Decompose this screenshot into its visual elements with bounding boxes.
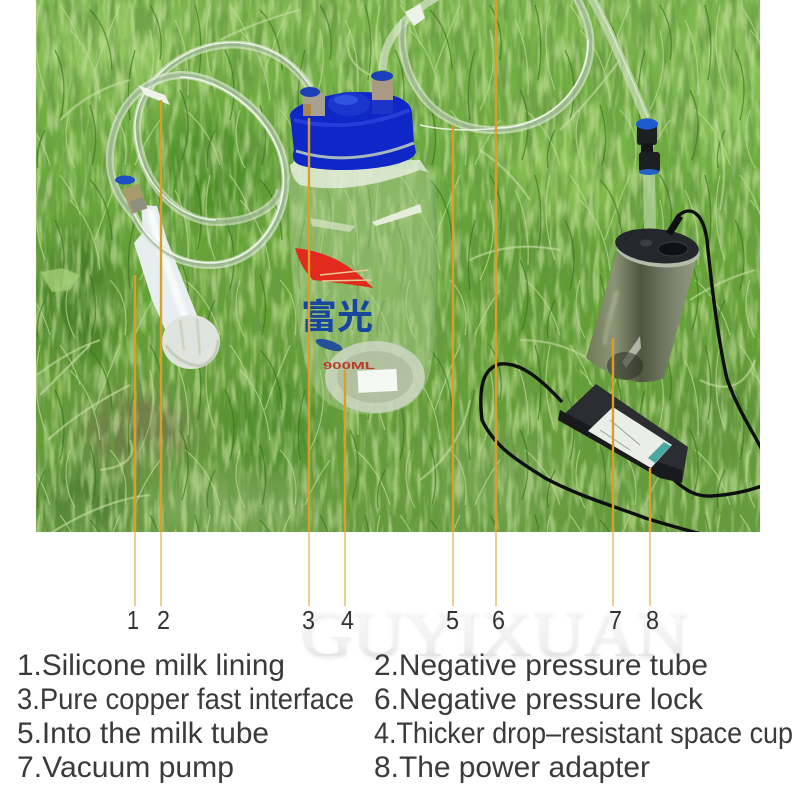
jar small red text: 900ML — [323, 361, 375, 372]
clear tube: lining to jar — [135, 43, 310, 222]
photo: milking kit on grass — [30, 0, 765, 540]
clear tube: to vacuum pump — [590, 0, 650, 232]
jar bottom disc — [325, 341, 425, 413]
jar blue oval — [316, 338, 342, 352]
legend text: 3.Pure copper fast interface — [17, 683, 354, 716]
legend text: 5.Into the milk tube — [17, 717, 269, 750]
pump power cord — [669, 211, 762, 450]
number labels — [127, 605, 659, 635]
watermark GUYIXUAN: GUYIXUAN — [300, 598, 688, 671]
number labels: 7 — [609, 605, 622, 635]
negative pressure lock — [636, 118, 660, 175]
blue jar lid — [290, 92, 416, 170]
number labels: 1 — [127, 605, 139, 635]
leader lines below photo — [135, 532, 650, 606]
silicone milk lining — [134, 205, 220, 369]
legend text: 7.Vacuum pump — [17, 751, 234, 784]
vacuum pump — [586, 225, 702, 382]
clear tube: large loop — [110, 75, 286, 265]
number labels: 2 — [157, 605, 170, 635]
jar body — [289, 165, 436, 414]
legend text: 2.Negative pressure tube — [374, 649, 708, 682]
tube clip — [138, 85, 170, 105]
jar white label — [357, 369, 397, 393]
number labels: 8 — [646, 605, 659, 635]
watermark GUYIXUAN: GUYIXUAN — [301, 600, 689, 673]
number labels: 4 — [341, 605, 354, 635]
jar blue brand text: 富光 — [301, 298, 373, 337]
number labels: 5 — [446, 605, 459, 635]
clear tube: right loop to jar — [383, 0, 590, 130]
number labels: 6 — [492, 605, 505, 635]
legend text: 8.The power adapter — [374, 751, 650, 784]
power adapter — [558, 384, 688, 483]
leader lines — [135, 0, 650, 532]
quick connector on lining — [115, 176, 148, 214]
jar red logo — [295, 248, 373, 288]
power adapter cord — [481, 364, 762, 535]
grass background — [30, 0, 765, 540]
legend text: 6.Negative pressure lock — [374, 683, 703, 716]
jar fitting left — [300, 87, 325, 116]
jar fitting right — [371, 71, 393, 114]
tube clip top — [405, 4, 425, 26]
legend text: 1.Silicone milk lining — [17, 649, 285, 682]
jar — [289, 160, 436, 414]
legend text — [17, 649, 793, 784]
number labels: 3 — [302, 605, 315, 635]
